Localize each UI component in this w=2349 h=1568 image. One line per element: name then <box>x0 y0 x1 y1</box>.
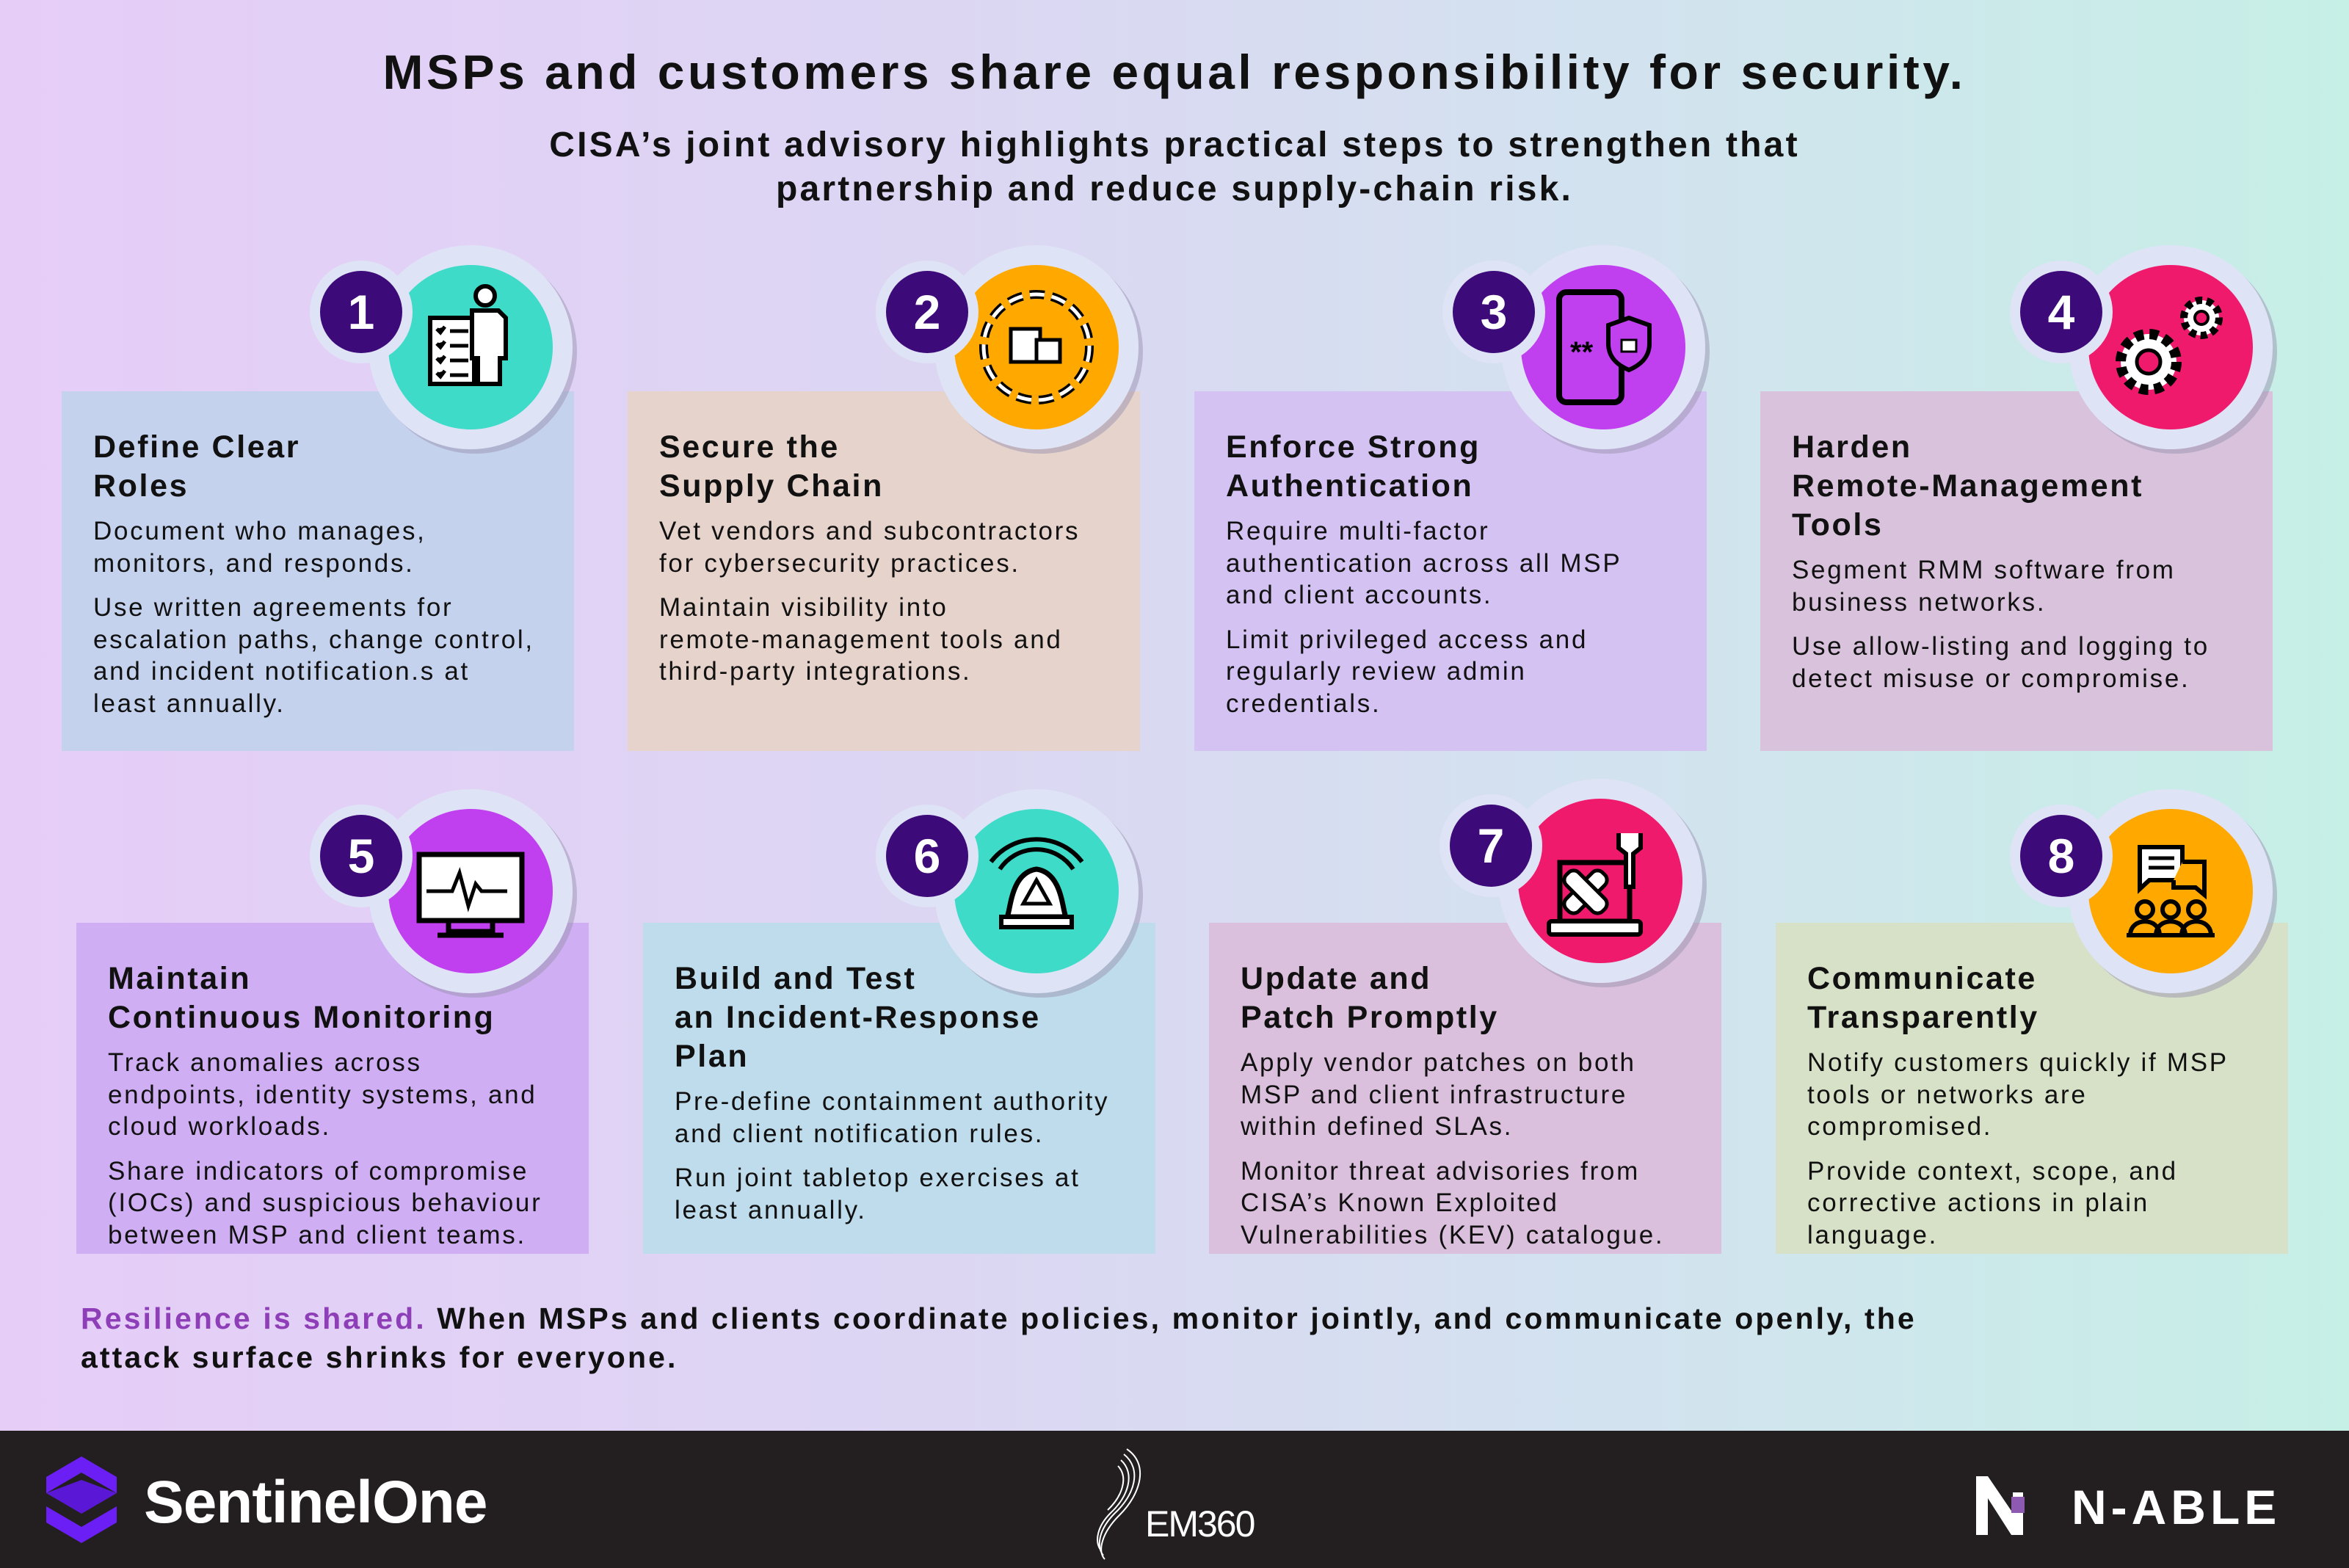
panel: 4 harden remote-management tools: Harden <box>1792 429 1912 465</box>
subtitle: CISA’s joint advisory highlights practical steps to strengthen that <box>549 126 1800 164</box>
panel: 1 define clear roles: Use written agreements for <box>93 593 453 622</box>
panel: 2 secure the supply chain: Maintain visibility into <box>659 593 948 622</box>
icon 1: checklist person: 1 <box>348 285 374 339</box>
panel: 4 harden remote-management tools: detect misuse or compromise. <box>1792 664 2190 693</box>
panel: 1 define clear roles: least annually. <box>93 689 286 718</box>
panel: 7 update and patch <box>1209 923 1721 1254</box>
logo: N-ABLE <box>1976 1476 2281 1535</box>
panel: 1 define clear roles: Document who manages, <box>93 517 426 545</box>
icon 6: alarm bell: 6 <box>914 829 940 883</box>
panel: 5 maintain continuous monitoring: endpoints, identity systems, and <box>108 1081 537 1108</box>
panel: 2 secure the supply chain: remote-management tools and <box>659 625 1063 653</box>
title: MSPs and customers share equal responsibility for security. <box>383 45 1966 99</box>
panel: 3 enforce strong authentication: Require multi-factor <box>1226 517 1489 545</box>
icon 6: alarm bell <box>876 789 1143 998</box>
panel: 7 update and patch: within defined SLAs. <box>1241 1112 1513 1141</box>
panel: 3 enforce strong authentication: authentication across all MSP <box>1226 549 1622 577</box>
panel: 2 secure the supply chain: for cybersecurity practices. <box>659 549 1020 577</box>
panel: 5 maintain continuous monitoring: Track anomalies across <box>108 1048 422 1077</box>
footer bar <box>0 1431 2349 1568</box>
panel: 5 maintain continuous monitoring: Share indicators of compromise <box>108 1157 529 1185</box>
panel: 4 harden remote-management tools: Tools <box>1792 507 1883 542</box>
panel: 8 communicate transparently: Provide context, scope, and <box>1807 1157 2178 1185</box>
conclusion text: Resilience is shared. When MSPs and clients coordinate policies, monitor jointly, and communicate openly, the <box>81 1302 1917 1335</box>
panel: 5 maintain continuous monitoring: Maintain <box>108 961 251 996</box>
icon 2: supply chain <box>876 245 1143 454</box>
panel: 6 build and test IR plan <box>643 923 1155 1254</box>
panel: 7 update and patch: MSP and client infrastructure <box>1241 1081 1627 1108</box>
panel: 8 communicate transparently: language. <box>1807 1220 1938 1249</box>
panel: 6 build and test IR plan: and client notification rules. <box>675 1119 1044 1148</box>
logo: SentinelOne <box>46 1456 487 1543</box>
panel: 7 update and patch: Apply vendor patches on both <box>1241 1048 1636 1077</box>
subtitle <box>549 126 1800 208</box>
panel: 3 enforce strong authentication: regularly review admin <box>1226 657 1527 686</box>
panel: 6 build and test IR plan: Run joint tabletop exercises at <box>675 1164 1081 1192</box>
panel: 4 harden remote-management tools: Remote-Management <box>1792 468 2143 504</box>
panel: 6 build and test IR plan: Pre-define containment authority <box>675 1087 1109 1116</box>
icon 4: gears <box>2010 245 2277 454</box>
panel: 1 define clear roles: Roles <box>93 468 189 504</box>
panel: 5 maintain continuous monitoring: between MSP and client teams. <box>108 1220 526 1249</box>
icon 1: checklist person <box>310 245 577 454</box>
subtitle: partnership and reduce supply-chain risk. <box>776 170 1573 208</box>
panel: 8 communicate transparently: compromised. <box>1807 1112 1992 1141</box>
panel: 6 build and test IR plan: Build and Test <box>675 961 916 996</box>
panel: 4 harden remote-management tools: Segment RMM software from <box>1792 556 2176 584</box>
icon 8: communication: 8 <box>2048 829 2074 883</box>
panel: 2 secure the supply chain <box>628 391 1140 751</box>
panel: 1 define clear roles <box>62 391 574 751</box>
icon 3: phone with shield: ** <box>1570 336 1594 369</box>
panel: 3 enforce strong authentication: credentials. <box>1226 689 1381 718</box>
logo: EM360: EM360 <box>1145 1503 1254 1545</box>
panel: 4 harden remote-management tools <box>1760 391 2273 751</box>
icon 3: phone with shield <box>1442 245 1710 454</box>
panel: 4 harden remote-management tools: business networks. <box>1792 587 2046 617</box>
panel: 3 enforce strong authentication: Limit privileged access and <box>1226 625 1588 653</box>
icon 7: laptop patch: 7 <box>1478 819 1504 873</box>
panel: 8 communicate transparently: Communicate <box>1807 961 2037 996</box>
icon 8: communication <box>2010 789 2277 998</box>
panel: 7 update and patch: CISA’s Known Exploited <box>1241 1188 1559 1217</box>
logo: EM360 <box>1097 1448 1254 1560</box>
panel: 5 maintain continuous monitoring: Continuous Monitoring <box>108 1000 495 1035</box>
panel: 2 secure the supply chain: third-party integrations. <box>659 657 971 686</box>
panel: 4 harden remote-management tools: Use allow-listing and logging to <box>1792 632 2210 661</box>
panel: 6 build and test IR plan: an Incident-Response <box>675 1000 1041 1035</box>
panel: 8 communicate transparently: Notify customers quickly if MSP <box>1807 1048 2229 1077</box>
panel: 8 communicate transparently: Transparently <box>1807 1000 2039 1035</box>
icon 7: laptop patch <box>1439 779 1707 987</box>
panel: 2 secure the supply chain: Vet vendors and subcontractors <box>659 517 1080 545</box>
logo: N-ABLE: N-ABLE <box>2072 1480 2281 1534</box>
panel: 3 enforce strong authentication: Enforce Strong <box>1226 429 1481 465</box>
panel: 7 update and patch: Vulnerabilities (KEV) catalogue. <box>1241 1220 1664 1249</box>
panel: 3 enforce strong authentication <box>1194 391 1707 751</box>
panel: 5 maintain continuous monitoring: (IOCs) and suspicious behaviour <box>108 1188 542 1217</box>
panel: 1 define clear roles: escalation paths, change control, <box>93 625 534 653</box>
panel: 6 build and test IR plan: Plan <box>675 1039 749 1074</box>
icon 5: monitor <box>310 789 577 998</box>
conclusion text <box>81 1302 1917 1374</box>
panel: 7 update and patch: Patch Promptly <box>1241 1000 1499 1035</box>
panel: 2 secure the supply chain: Supply Chain <box>659 468 884 504</box>
icon 4: gears: 4 <box>2048 285 2075 339</box>
panel: 5 maintain continuous monitoring: cloud workloads. <box>108 1112 331 1141</box>
panel: 7 update and patch: Update and <box>1241 961 1431 996</box>
icon 5: monitor: 5 <box>348 829 374 883</box>
panel: 1 define clear roles: monitors, and responds. <box>93 549 415 577</box>
icon 2: supply chain: 2 <box>914 285 940 339</box>
icon 3: phone with shield: 3 <box>1481 285 1507 339</box>
panel: 3 enforce strong authentication: Authentication <box>1226 468 1473 504</box>
panel: 5 maintain continuous monitoring <box>76 923 589 1254</box>
panel: 7 update and patch: Monitor threat advisories from <box>1241 1157 1640 1185</box>
panel: 6 build and test IR plan: least annually. <box>675 1195 867 1224</box>
logo: SentinelOne: SentinelOne <box>144 1469 487 1536</box>
panel: 8 communicate transparently: corrective actions in plain <box>1807 1188 2149 1217</box>
panel: 1 define clear roles: Define Clear <box>93 429 300 465</box>
panel: 8 communicate transparently: tools or networks are <box>1807 1081 2088 1108</box>
conclusion text: attack surface shrinks for everyone. <box>81 1340 678 1374</box>
panel: 1 define clear roles: and incident notification.s at <box>93 657 470 686</box>
panel: 8 communicate transparently <box>1776 923 2288 1254</box>
panel: 2 secure the supply chain: Secure the <box>659 429 840 465</box>
panel: 3 enforce strong authentication: and client accounts. <box>1226 581 1492 609</box>
